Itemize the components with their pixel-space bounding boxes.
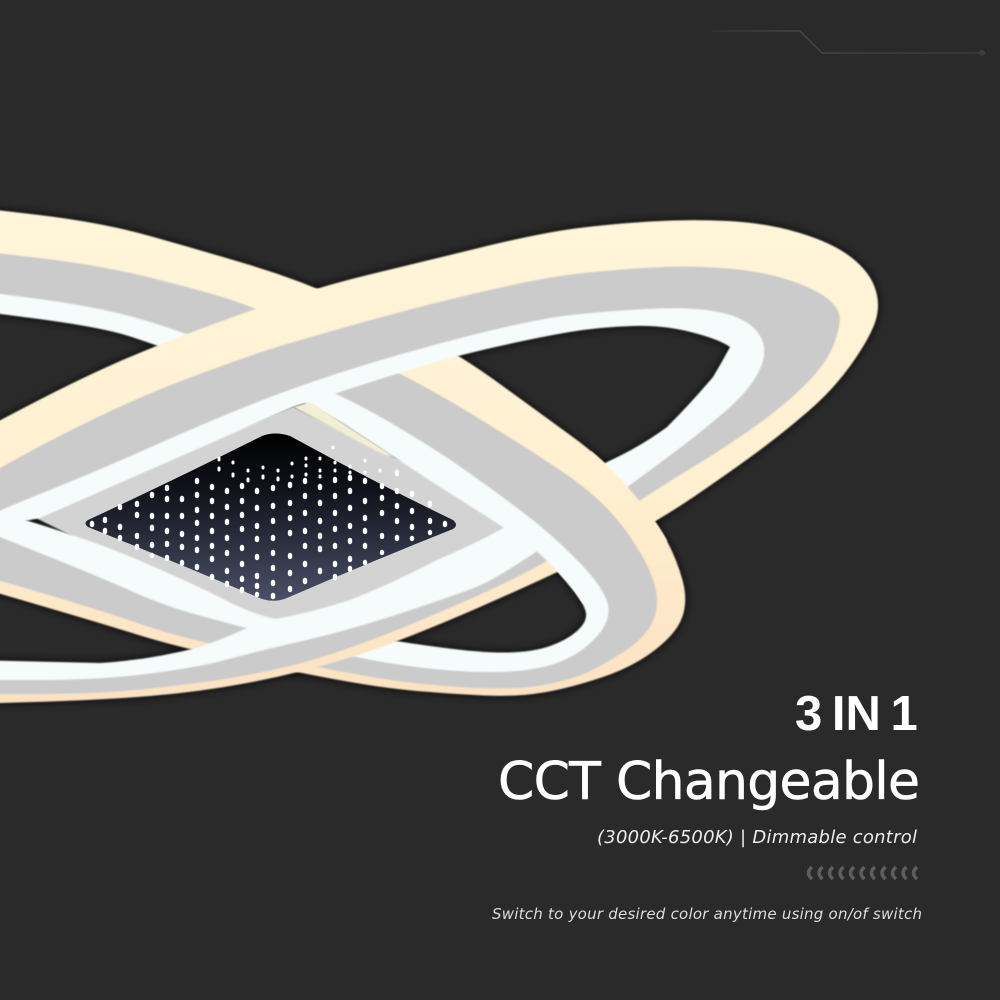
lamp centre plate [30, 407, 530, 640]
lamp shadow [0, 207, 878, 704]
heading: 3 IN 1: 3 IN 1 [795, 687, 918, 741]
mirror LED dots, large [92, 472, 445, 597]
infinity mirror diamond [86, 434, 456, 601]
description: Switch to your desired color anytime using on/of switch [492, 905, 922, 923]
lamp ring: lower crossing ring [0, 207, 685, 696]
mirror LED dots, small [219, 447, 380, 481]
lamp ring: upper crossing ring [0, 220, 878, 704]
chevron row [808, 867, 917, 879]
subtitle: (3000K-6500K) | Dimmable control [597, 827, 917, 848]
lamp centre strip [293, 402, 395, 457]
decorative connector line with end dot [712, 31, 985, 56]
ceiling lamp: product photo of two crossing rings [0, 207, 878, 704]
heading: CCT Changeable: CCT Changeable [498, 752, 920, 812]
lamp ring: lower ring overlap at the right crossing [492, 450, 668, 604]
